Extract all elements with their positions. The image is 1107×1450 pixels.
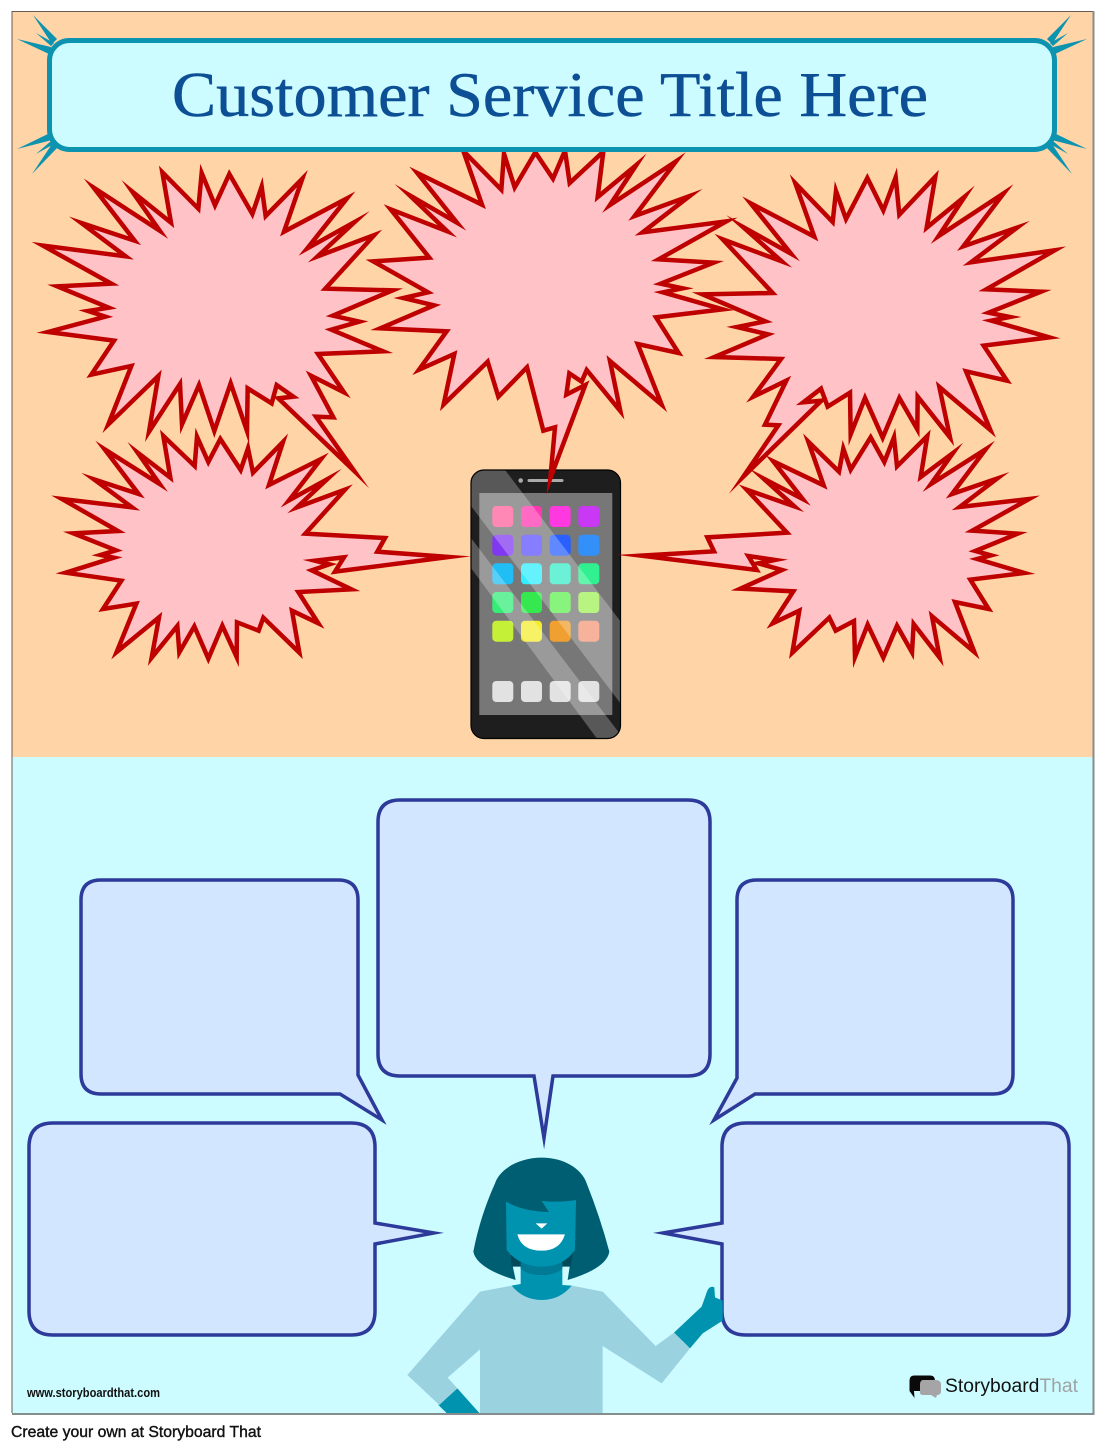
- title text: Customer Service Title Here: [172, 59, 928, 130]
- logo: StoryboardThat: [910, 1376, 1079, 1398]
- speech bubble: top centre: [378, 800, 710, 1138]
- person lower hand: [438, 1388, 479, 1413]
- burst: top right with tail toward phone: [702, 177, 1055, 477]
- burst: lower left with tail toward phone: [62, 436, 449, 659]
- burst: lower right with tail toward phone: [641, 436, 1029, 658]
- footer link text: Create your own at Storyboard That: [11, 1424, 262, 1441]
- speech bubble: lower right: [663, 1123, 1069, 1335]
- speech bubble: upper left: [81, 880, 382, 1120]
- burst: top left with tail toward phone: [43, 172, 393, 471]
- person hair: [473, 1158, 609, 1280]
- website text: www.storyboardthat.com: [26, 1386, 160, 1400]
- speech bubble: upper right: [714, 880, 1013, 1120]
- person smile: [517, 1234, 565, 1251]
- person nose: [536, 1223, 547, 1229]
- person shirt: [407, 1286, 690, 1413]
- logo icon: speech bubbles: [910, 1376, 941, 1398]
- person neck shadow: [510, 1252, 573, 1275]
- burst: top centre with tail toward phone: [373, 151, 726, 478]
- panel: top orange background: [12, 11, 1093, 757]
- person: smiling woman pointing up: [407, 1158, 723, 1413]
- panel: bottom light blue background: [12, 757, 1093, 1413]
- person face: [506, 1200, 576, 1267]
- person hand and wrist: [674, 1287, 723, 1348]
- title banner with corner spikes: [17, 15, 1087, 174]
- icon: smartphone: [471, 470, 621, 740]
- person neck: [512, 1257, 572, 1300]
- logo wordmark: StoryboardThat: [945, 1376, 1079, 1397]
- speech bubble: lower left: [29, 1123, 434, 1335]
